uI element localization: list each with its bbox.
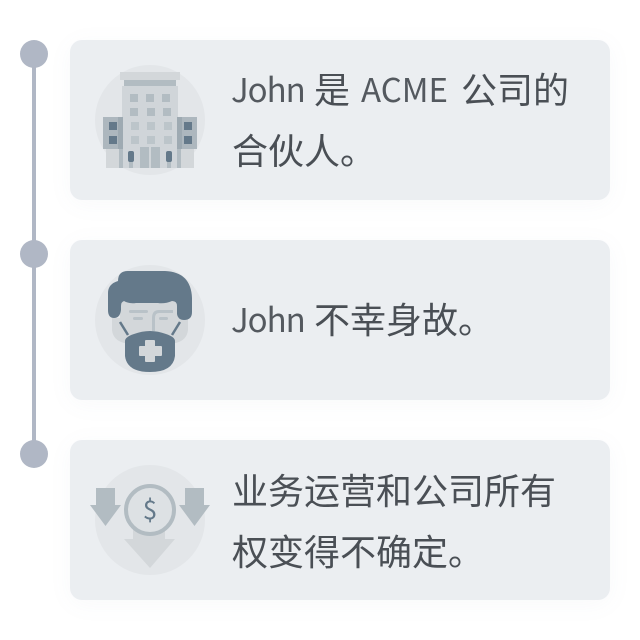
text: card 1: 公司的 (461, 62, 569, 114)
text: card 1: 是 (314, 62, 350, 114)
text: card 1 (231, 62, 569, 175)
panel: card 2 (70, 240, 610, 400)
text: card 3 (232, 463, 556, 576)
panel: card 3 (70, 440, 610, 600)
icon: falling money arrows: $ (143, 490, 157, 527)
text: card 3: 权变得不确定。 (232, 524, 484, 576)
text: card 2 (231, 292, 494, 344)
panel: card 1 (70, 40, 610, 200)
text: card 1: John (231, 64, 305, 112)
text: card 2: John (231, 294, 305, 342)
text: card 1: 合伙人。 (232, 123, 376, 175)
text: card 1: ACME (361, 64, 448, 112)
text: card 2: 不幸身故。 (314, 292, 494, 344)
text: card 3: 业务运营和公司所有 (232, 463, 556, 515)
